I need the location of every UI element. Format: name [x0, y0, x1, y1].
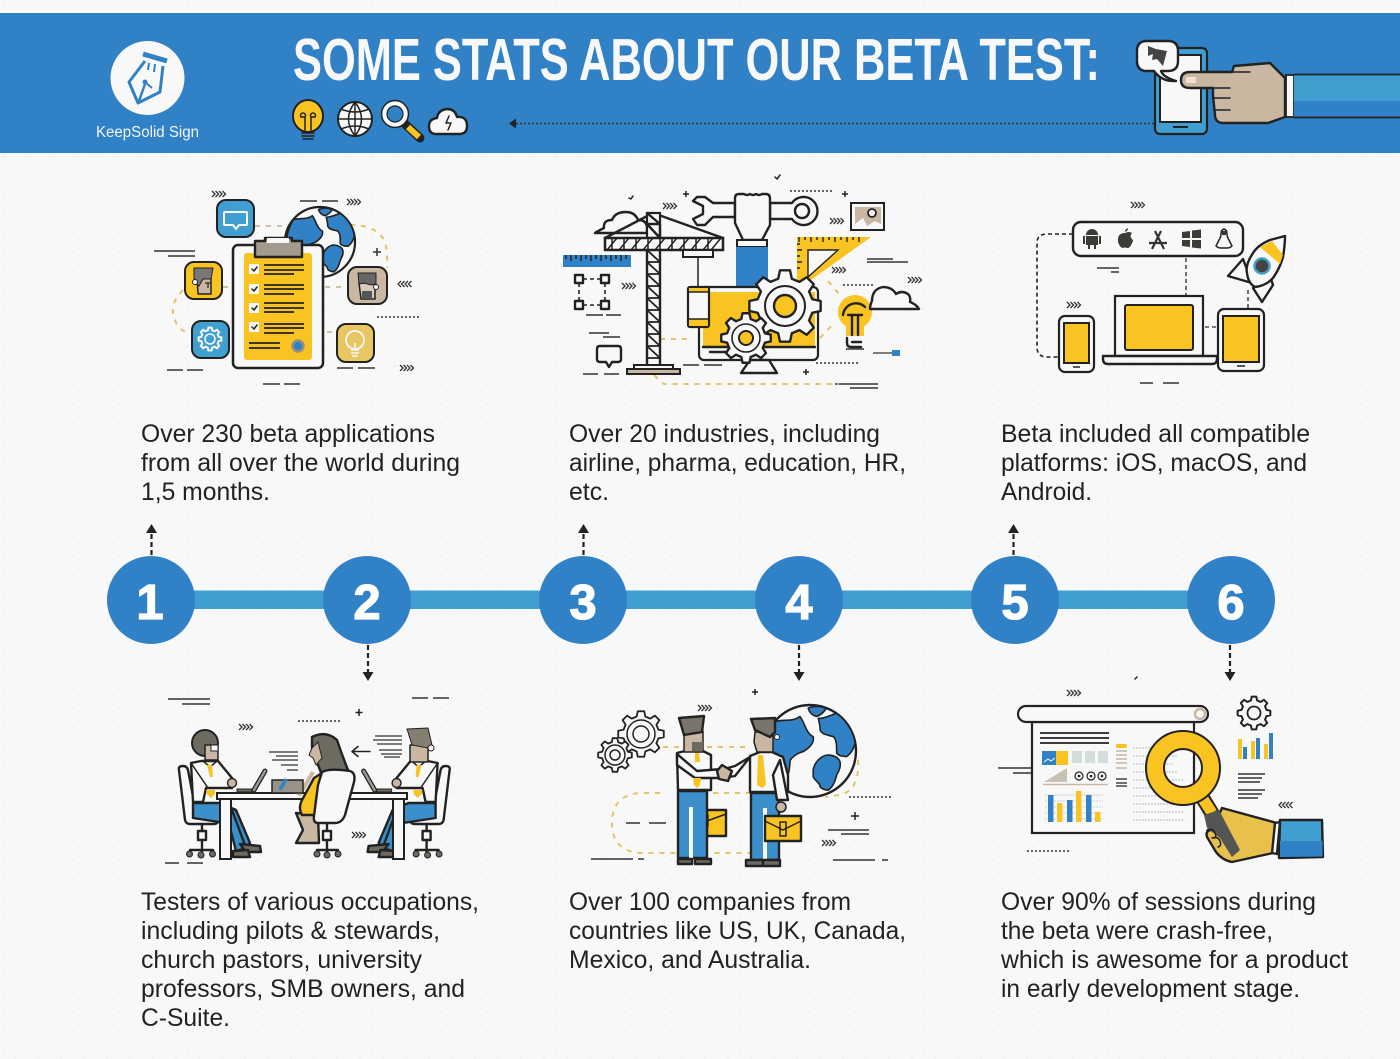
- mini bar chart: [1238, 733, 1273, 759]
- presentation screen: [1018, 706, 1208, 833]
- text: stat 1: 1,5 months.: [141, 478, 270, 506]
- icon: cloud left: [595, 212, 647, 233]
- illustration 5: handshake: [591, 689, 891, 866]
- ruler: [563, 255, 631, 267]
- tile: light bulb: [337, 324, 374, 362]
- text: stat 6: Over 90% of sessions during: [1001, 888, 1316, 916]
- header banner: [0, 13, 1400, 153]
- text: stat 2: C-Suite.: [141, 1004, 230, 1032]
- tablet: [1218, 309, 1264, 371]
- step 5: [971, 556, 1059, 644]
- tester right: [364, 728, 450, 858]
- text: stat 1: from all over the world during: [141, 449, 460, 477]
- illustration 2: crane, tools and monitor: [563, 175, 922, 388]
- set square: [797, 237, 871, 290]
- text: stat 3: Over 20 industries, including: [569, 420, 880, 448]
- text: stat 6: in early development stage.: [1001, 975, 1300, 1003]
- globe: [285, 207, 355, 277]
- step 6: [1187, 556, 1275, 644]
- icon: apple: [1118, 228, 1133, 248]
- step 4: 4: [785, 576, 813, 630]
- tile: male avatar on yellow: [185, 262, 222, 299]
- step 6: 6: [1217, 576, 1245, 630]
- text: stat 4: countries like US, UK, Canada,: [569, 917, 906, 945]
- text: stat 1: Over 230 beta applications: [141, 420, 435, 448]
- sleeve: [1286, 74, 1400, 118]
- illustration 6: presentation and magnifier: [998, 677, 1323, 862]
- arrow: step 2 down: [362, 645, 374, 681]
- text: stat 2: including pilots & stewards,: [141, 917, 440, 945]
- step 3: 3: [569, 576, 597, 630]
- image frame: [851, 203, 884, 230]
- tile: chat: [217, 200, 254, 237]
- gears: [598, 711, 664, 772]
- arrow: step 3 up: [578, 524, 589, 555]
- gripping hand: [1204, 808, 1277, 862]
- icon: hand: [1181, 63, 1285, 123]
- text: stat 3: airline, pharma, education, HR,: [569, 449, 906, 477]
- gear: [1238, 697, 1270, 729]
- chat bubble: [597, 346, 621, 367]
- illustration 3: devices and platforms: [1037, 202, 1285, 383]
- illustration 1: clipboard with application tiles: [154, 191, 419, 384]
- icon: linux: [1216, 229, 1232, 248]
- tile: gear: [192, 321, 229, 358]
- icon: globe: [338, 102, 372, 136]
- logo: KeepSolid Sign pen nib: [110, 41, 184, 115]
- text: stat 5: Android.: [1001, 478, 1092, 506]
- title: SOME STATS ABOUT OUR BETA TEST:: [293, 27, 1100, 93]
- globe: [764, 705, 856, 797]
- timeline: [107, 556, 1275, 644]
- gears: [721, 270, 821, 363]
- arrow: step 5 up: [1008, 524, 1019, 555]
- icon: cloud right: [870, 287, 919, 309]
- sleeve: [1272, 820, 1323, 858]
- table: [217, 793, 407, 859]
- illustration: phone and pointing hand: [1137, 41, 1400, 134]
- man right: [717, 718, 801, 866]
- step 5: 5: [1001, 576, 1029, 630]
- bar chart: [1045, 791, 1103, 822]
- selection square: [575, 275, 609, 309]
- step 1: [107, 556, 195, 644]
- crane: [605, 213, 723, 374]
- text: stat 3: etc.: [569, 478, 609, 506]
- icon: cloud: [429, 109, 467, 134]
- arrow: step 1 up: [146, 524, 157, 555]
- arrow: dotted pointer to the hand: [509, 118, 1155, 128]
- light bulb: [838, 295, 872, 347]
- icon: light bulb: [293, 100, 323, 139]
- text: stat 2: church pastors, university: [141, 946, 422, 974]
- text: stat 4: Mexico, and Australia.: [569, 946, 811, 974]
- arrow: step 6 down: [1224, 645, 1236, 681]
- icon: windows: [1182, 230, 1201, 248]
- logo wordmark: KeepSolid Sign: [96, 124, 199, 141]
- icon: app store: [1149, 231, 1167, 249]
- step 4: [755, 556, 843, 644]
- rocket: [1228, 236, 1285, 302]
- text: stat 4: Over 100 companies from: [569, 888, 851, 916]
- illustration 4: testers around a table: [165, 698, 450, 863]
- text: stat 5: Beta included all compatible: [1001, 420, 1310, 448]
- text snippets and arrow: [269, 736, 402, 770]
- step 2: 2: [353, 576, 381, 630]
- step 1: 1: [136, 576, 164, 630]
- platforms bar: [1073, 222, 1243, 256]
- clipboard: [233, 238, 323, 368]
- step 2: [323, 556, 411, 644]
- phone: [1059, 316, 1094, 372]
- pin: [873, 350, 900, 356]
- text: stat 2: professors, SMB owners, and: [141, 975, 465, 1003]
- icon: android: [1083, 229, 1101, 249]
- man left: [677, 716, 726, 864]
- hand holding wrench: [693, 194, 817, 287]
- monitor with hanging phone: [688, 287, 818, 373]
- text: stat 2: Testers of various occupations,: [141, 888, 479, 916]
- laptop: [1103, 296, 1217, 364]
- magnifier: [1155, 740, 1213, 815]
- arrow: step 4 down: [794, 645, 804, 681]
- icon: megaphone speech bubble: [1137, 41, 1178, 81]
- tester woman: [272, 734, 354, 858]
- step 3: [539, 556, 627, 644]
- tester left: [179, 730, 265, 858]
- text: stat 6: which is awesome for a product: [1000, 946, 1348, 974]
- text: stat 5: platforms: iOS, macOS, and: [1001, 449, 1307, 477]
- tile: male avatar on tan: [348, 267, 387, 304]
- icon: magnifier: [382, 100, 420, 138]
- text: stat 6: the beta were crash-free,: [1001, 917, 1273, 945]
